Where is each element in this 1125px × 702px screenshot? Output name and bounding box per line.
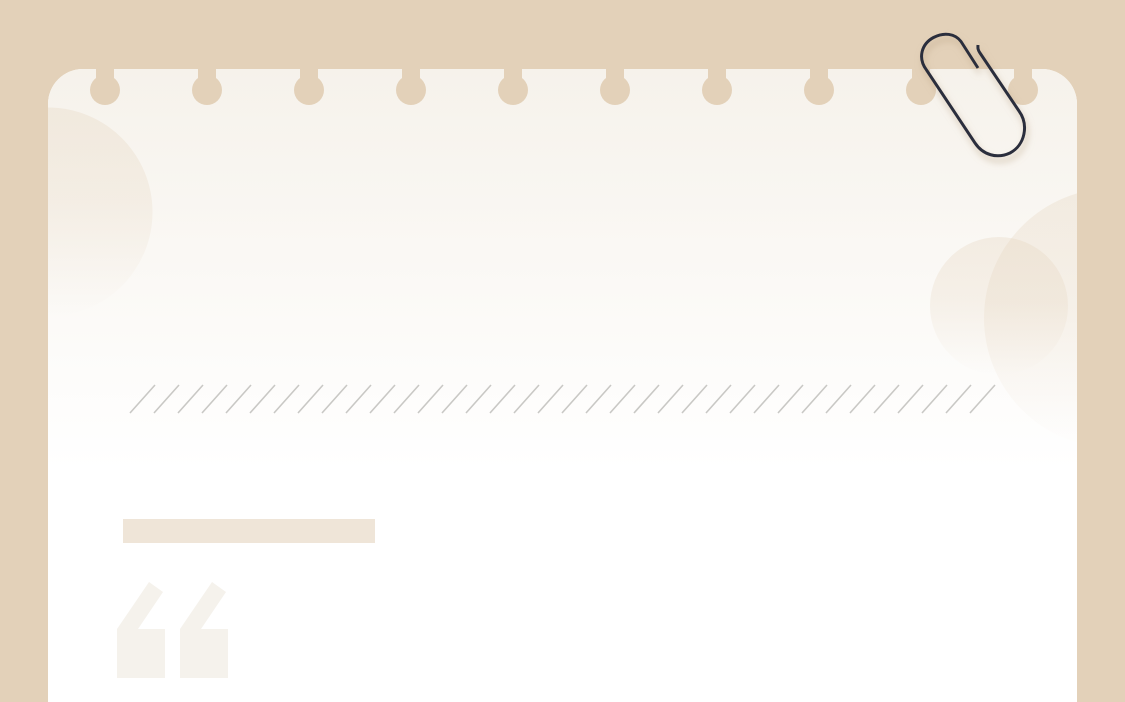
hatch line divider [130,385,995,413]
icon: paperclip [922,34,1025,156]
heading placeholder bar [123,519,375,543]
binder holes [90,68,1038,105]
icon: quotation mark [117,582,228,678]
decorative circles [48,108,1077,374]
